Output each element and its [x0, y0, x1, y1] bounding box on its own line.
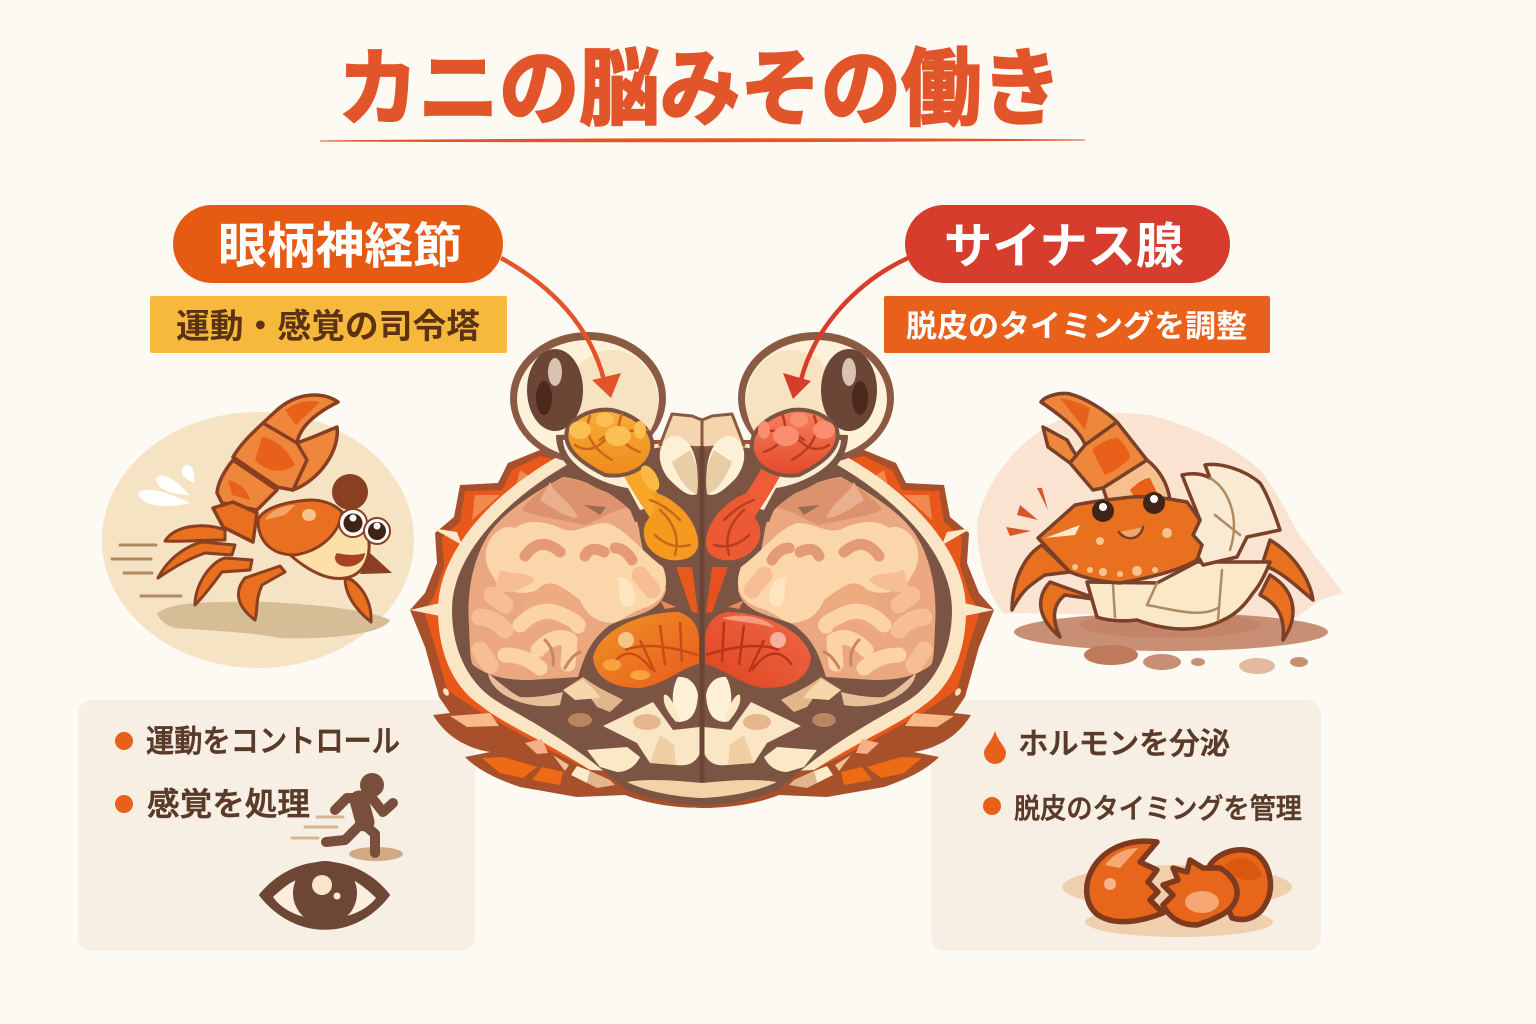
bullet: sense processing: 感覚を処理: [147, 786, 310, 822]
mouth: [335, 553, 365, 567]
crab shell: [410, 440, 994, 808]
head ball: [332, 474, 368, 510]
arrow: sinus gland: [783, 258, 908, 399]
lower lobe orange: [593, 612, 699, 688]
carapace: [1038, 497, 1202, 583]
alert marks: [1006, 488, 1048, 536]
shell top: [1182, 464, 1280, 565]
claw colour patches: [1060, 398, 1158, 498]
lower anatomy: [488, 673, 916, 798]
subtitle: command centre: 運動・感覚の司令塔: [176, 308, 480, 346]
molted shell body: [1087, 562, 1270, 629]
nerve tracts: [676, 567, 728, 613]
bullet: motion control: 運動をコントロール: [146, 724, 400, 759]
motion lines: [112, 545, 181, 596]
eye stalks: [510, 332, 894, 464]
legs: [1012, 540, 1313, 640]
lower lobe red: [705, 612, 811, 688]
claw colour patches: [228, 401, 320, 500]
eyes and smile: [1092, 492, 1165, 538]
subtitle: molt timing: [884, 296, 1270, 353]
icon: eye: [260, 861, 389, 929]
panel: right feature list: [931, 700, 1321, 951]
central crab anatomy: [410, 332, 994, 808]
arrow: ganglion: [501, 258, 621, 398]
label pill: 眼柄神経節: [173, 205, 503, 283]
bullet: molt timing: 脱皮のタイミングを管理: [1014, 793, 1302, 824]
eyes: [339, 509, 390, 544]
subtitle: command centre: [150, 296, 507, 353]
panel: left feature list: [78, 700, 475, 951]
illustration: running crab: [102, 395, 414, 668]
label pill: サイナス腺: サイナス腺: [944, 220, 1184, 274]
sinus gland red: [706, 410, 838, 560]
claw: [1041, 393, 1170, 500]
bullet: hormone secretion: ホルモンを分泌: [1018, 728, 1230, 761]
brain lobes: [468, 477, 936, 680]
claw: [213, 395, 338, 542]
body underside: [262, 510, 369, 578]
ground spots: [1084, 645, 1308, 674]
eyestalk ganglion orange: [566, 410, 698, 560]
icon: cracked eggs: [1062, 841, 1292, 937]
icon: running person: [292, 773, 403, 861]
carapace: [258, 500, 342, 555]
upper centre structures: [556, 414, 848, 782]
label pill: 眼柄神経節: 眼柄神経節: [218, 220, 462, 274]
subtitle: molt timing: 脱皮のタイミングを調整: [906, 309, 1247, 344]
title: カニの脳みその働き: [338, 42, 1062, 136]
sweat marks: [138, 465, 194, 506]
illustration: molting crab: [977, 393, 1343, 674]
legs: [158, 526, 371, 622]
label pill: サイナス腺: [905, 205, 1230, 283]
